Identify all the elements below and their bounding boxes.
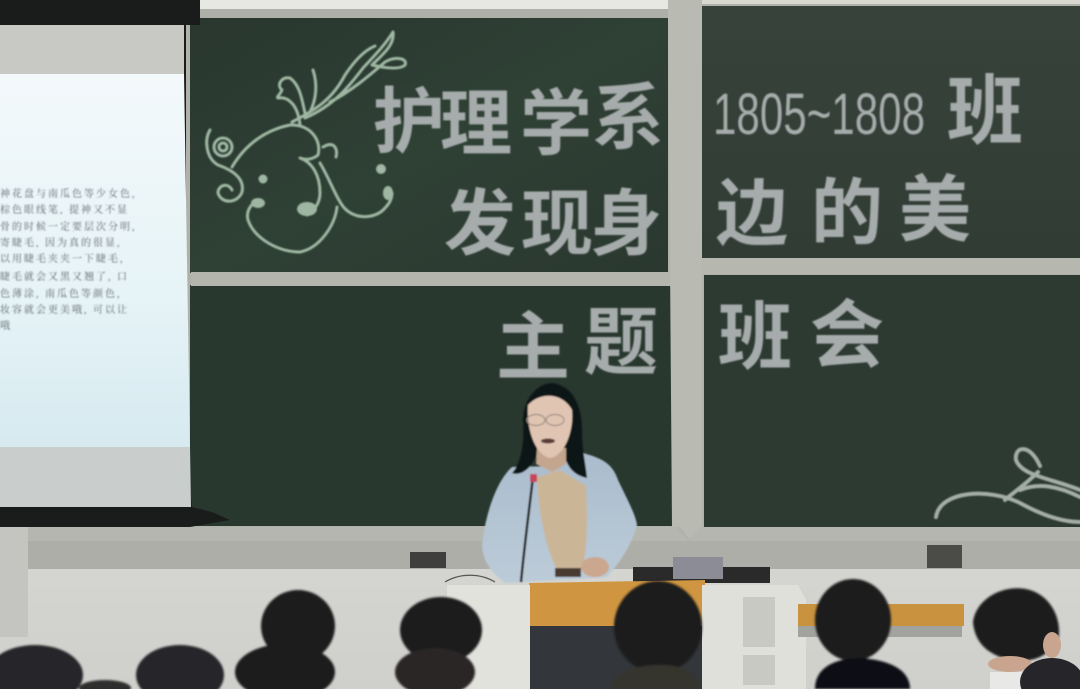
podium [447,557,806,689]
hand [581,557,609,577]
side desk [798,604,964,637]
chalk heading: 主题班会: 班 [718,296,792,379]
hair [512,383,587,478]
chalk heading: 发现身边的美: 现 [521,185,593,265]
board panel: bottom left [190,285,673,526]
neck [536,448,566,472]
chalk heading: 1805~1808 班: 班 [947,70,1023,155]
slide text: 寄睫毛, 因为真的很显, [0,236,122,249]
chalk heading: 发现身边的美: 身 [590,185,662,265]
projector screen [0,25,191,507]
face [528,396,572,458]
chalk flourish: top left [207,32,405,252]
slide text: 神花盘与南瓜色等少女色, [0,187,136,200]
slide text: 妆容就会更美哦, 可以让 [0,303,129,316]
chalk heading: 发现身边的美: 发 [444,185,516,265]
centre post [668,0,702,540]
jacket [482,453,637,583]
bottom tray [28,527,1080,541]
lower wall [0,527,1080,689]
board panel: bottom right [704,275,1080,527]
chalk heading: 主题班会: 题 [584,301,658,384]
mouth [541,438,555,444]
slide text: 骨的时候一定要层次分明, [0,220,136,233]
belt [555,568,581,577]
audience heads [0,579,1059,689]
chalk heading: 1805~1808 班: 1805~1808 [713,82,925,147]
black projector surround [0,0,230,527]
computer case left [447,585,530,689]
chalk heading: 护理学系: 护 [373,83,445,163]
slide text: 色薄涂, 南瓜色等颜色, [0,287,122,300]
speaker [482,383,637,583]
chalk heading: 护理学系: 系 [592,79,664,159]
glasses [527,414,564,426]
microphone [521,477,533,582]
chalk heading: 发现身边的美: 边 [716,175,788,255]
slide text: 哦 [0,319,12,332]
monitor bar [633,567,770,583]
slide text [0,187,136,332]
chalk heading: 主题班会: 主 [496,306,570,389]
chalk heading: 发现身边的美 [444,171,971,265]
sweater [537,470,587,568]
chalk tray: right [701,258,1080,274]
chalk heading: 护理学系 [373,79,664,165]
computer case right [702,585,806,689]
student skin and shirt accents [988,632,1080,689]
board panel: top left [190,18,668,273]
chalk heading: 护理学系: 学 [520,85,592,165]
chalk heading: 护理学系: 理 [440,85,512,165]
slide text: 棕色眼线笔, 提神又不显 [0,203,129,216]
chalkboard frame [186,0,1080,541]
chalk heading: 主题班会: 会 [810,294,884,377]
chalk flourish: bottom right [936,449,1080,522]
chalk heading: 发现身边的美: 美 [899,171,971,251]
board panel: top right [701,6,1080,258]
slide text: 以用睫毛夹夹一下睫毛, [0,252,124,265]
slide text: 睫毛就会又黑又翘了, 口 [0,270,129,283]
chalk heading: 发现身边的美: 的 [811,174,883,254]
chalk tray: left [191,272,673,286]
chalk heading: 主题班会 [496,294,884,389]
